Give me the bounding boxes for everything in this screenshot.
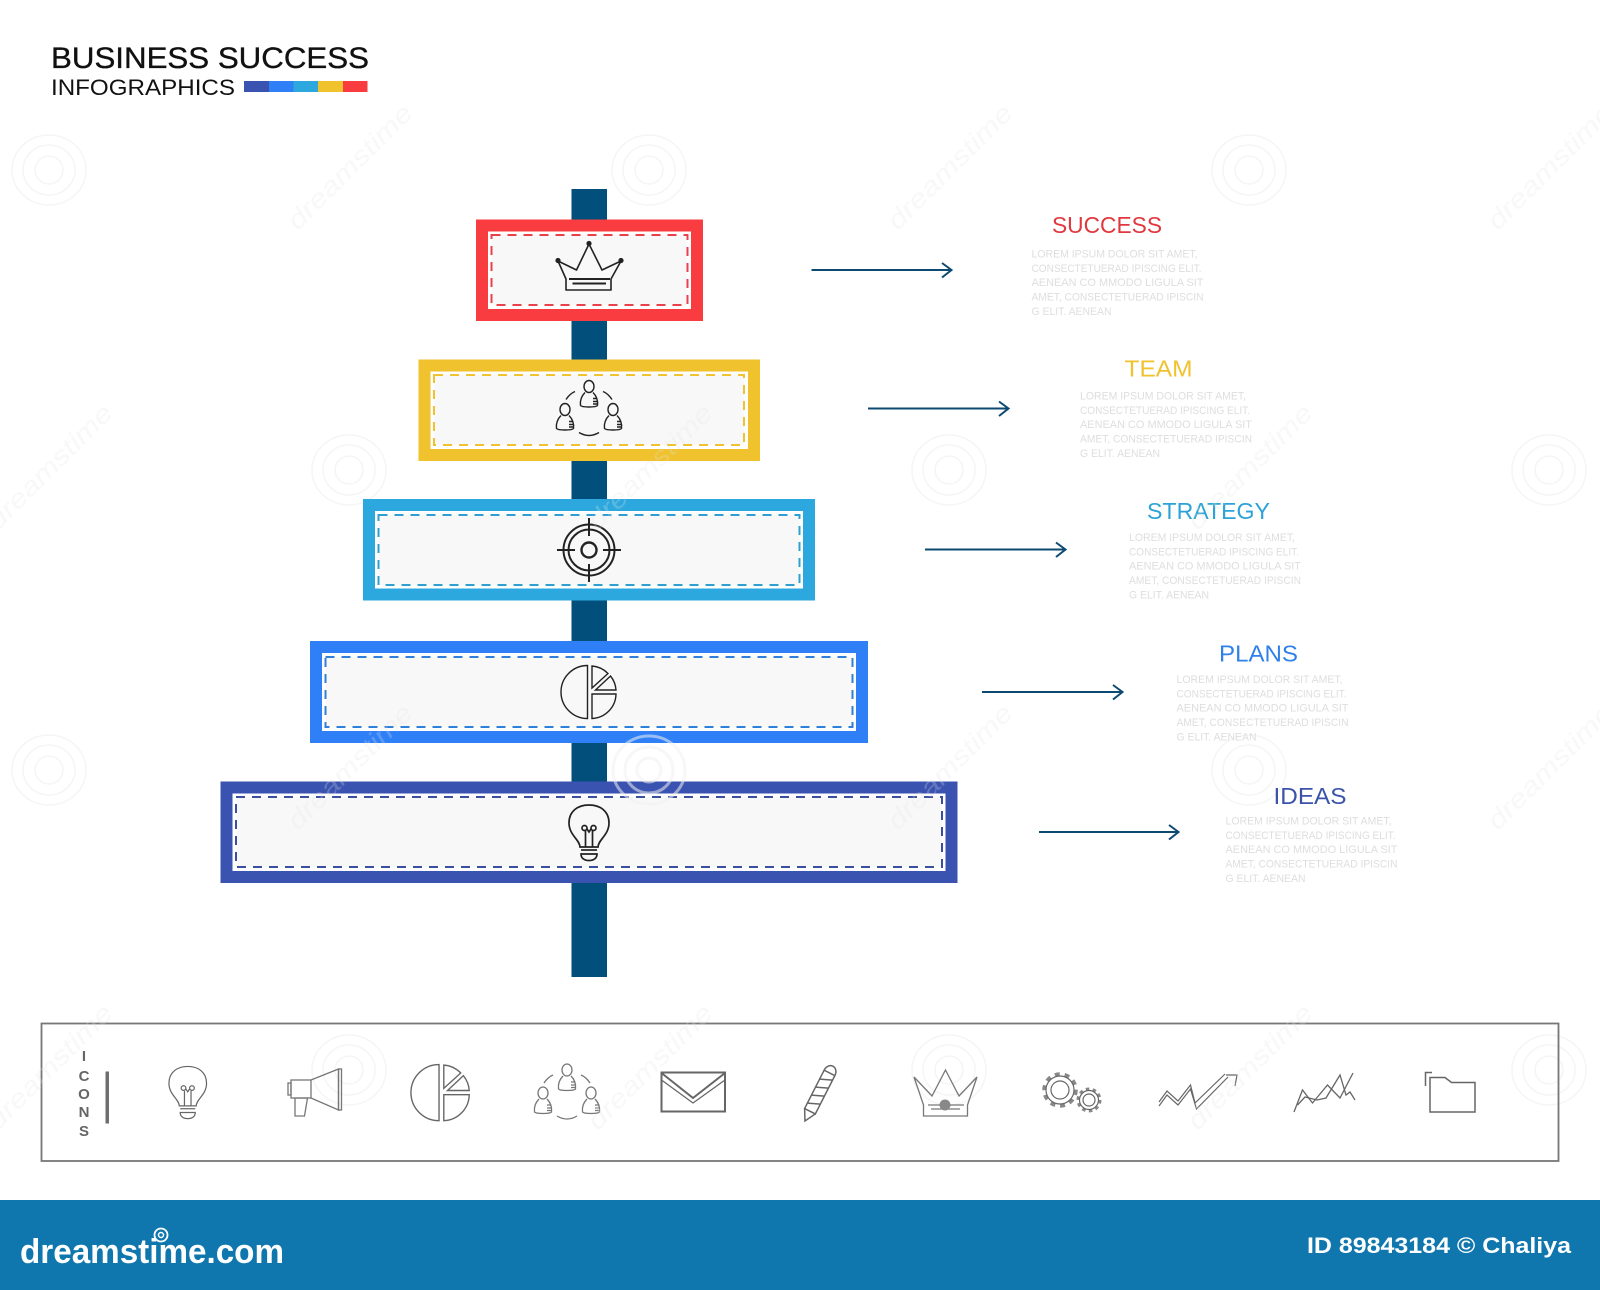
paragraph: team: AENEAN CO MMODO LIGULA SIT: [1080, 419, 1252, 431]
paragraph: success: [1032, 248, 1204, 318]
icon: light bulb: [169, 1066, 207, 1119]
icon: team: [556, 380, 622, 436]
text: dreamstime: [1181, 398, 1319, 536]
text block: team: [1080, 356, 1252, 460]
text: dreamstime: [581, 398, 719, 536]
label: icons: N: [79, 1104, 89, 1121]
heading: team: TEAM: [1124, 356, 1192, 382]
icon: zigzag chart: [1294, 1073, 1355, 1112]
arrow: ideas: [1039, 825, 1178, 840]
label: icons: S: [79, 1123, 89, 1140]
label: icons: [78, 1048, 90, 1140]
icon: pie chart: [411, 1065, 469, 1121]
text: dreamstime: [1481, 98, 1600, 236]
paragraph: success: LOREM IPSUM DOLOR SIT AMET,: [1032, 248, 1198, 260]
icon: envelope: [662, 1072, 725, 1112]
panel: ideas box: [220, 782, 958, 883]
icon: target: [557, 518, 621, 582]
paragraph: success: AENEAN CO MMODO LIGULA SIT: [1032, 277, 1204, 289]
paragraph: strategy: AMET, CONSECTETUERAD IPISCIN: [1129, 575, 1301, 587]
text: dreamstime: [581, 998, 719, 1136]
icon: pencil: [800, 1063, 838, 1124]
paragraph: plans: AMET, CONSECTETUERAD IPISCIN: [1176, 717, 1349, 729]
icon: gears: [1044, 1074, 1100, 1111]
icon: crown: [556, 242, 623, 290]
heading: ideas: IDEAS: [1274, 783, 1346, 809]
text: dreamstime: [881, 698, 1019, 836]
paragraph: plans: [1176, 674, 1349, 744]
paragraph: success: AMET, CONSECTETUERAD IPISCIN: [1032, 292, 1204, 304]
icon: team: [534, 1064, 600, 1119]
paragraph: plans: G ELIT. AENEAN: [1176, 732, 1257, 744]
text block: plans: [1176, 640, 1349, 744]
footer image id: ID 89843184 © Chaliya: [1307, 1233, 1572, 1258]
text: dreamstime: [281, 98, 419, 236]
title: business success: BUSINESS SUCCESS: [51, 42, 369, 75]
paragraph: success: CONSECTETUERAD IPISCING ELIT.: [1032, 263, 1202, 275]
text: dreamstime: [1181, 998, 1319, 1136]
footer banner: [0, 1200, 1600, 1290]
paragraph: team: AMET, CONSECTETUERAD IPISCIN: [1080, 434, 1252, 446]
icon: rising arrow: [1159, 1074, 1237, 1109]
text: dreamstime: [281, 698, 419, 836]
footer logo: dreamstime.com: [20, 1233, 284, 1271]
heading: success: SUCCESS: [1052, 212, 1162, 238]
colour bar: [244, 81, 368, 92]
panel: icon strip: [42, 1024, 1558, 1161]
panel: team box: [418, 360, 760, 461]
paragraph: ideas: [1226, 816, 1398, 885]
heading: strategy: STRATEGY: [1147, 498, 1270, 524]
arrow: team: [868, 402, 1008, 416]
paragraph: strategy: AENEAN CO MMODO LIGULA SIT: [1129, 560, 1301, 572]
text block: success: [1032, 212, 1204, 318]
paragraph: ideas: AENEAN CO MMODO LIGULA SIT: [1226, 844, 1398, 856]
arrow: plans: [982, 685, 1122, 700]
paragraph: strategy: [1129, 532, 1301, 602]
paragraph: plans: CONSECTETUERAD IPISCING ELIT.: [1176, 688, 1346, 700]
paragraph: strategy: CONSECTETUERAD IPISCING ELIT.: [1129, 546, 1299, 558]
paragraph: ideas: G ELIT. AENEAN: [1226, 873, 1306, 885]
paragraph: team: CONSECTETUERAD IPISCING ELIT.: [1080, 405, 1250, 417]
icon: light bulb: [569, 805, 609, 860]
label: icons: C: [79, 1068, 90, 1085]
icon: folder: [1426, 1072, 1475, 1112]
title block: [51, 42, 369, 100]
subtitle: infographics: INFOGRAPHICS: [51, 75, 235, 100]
arrow: strategy: [925, 542, 1066, 557]
icon: crown: [914, 1070, 977, 1116]
panel: success box: [476, 220, 703, 321]
paragraph: ideas: AMET, CONSECTETUERAD IPISCIN: [1226, 858, 1398, 870]
paragraph: strategy: LOREM IPSUM DOLOR SIT AMET,: [1129, 532, 1295, 544]
icon: megaphone: [288, 1069, 342, 1116]
paragraph: plans: AENEAN CO MMODO LIGULA SIT: [1176, 702, 1349, 714]
paragraph: success: G ELIT. AENEAN: [1032, 306, 1112, 318]
paragraph: team: LOREM IPSUM DOLOR SIT AMET,: [1080, 390, 1246, 402]
text: dreamstime: [1481, 698, 1600, 836]
text: dreamstime: [881, 98, 1019, 236]
central pole: [572, 189, 607, 977]
paragraph: strategy: G ELIT. AENEAN: [1129, 590, 1209, 602]
paragraph: ideas: LOREM IPSUM DOLOR SIT AMET,: [1226, 816, 1392, 828]
panel: plans box: [310, 641, 868, 743]
arrow: success: [812, 263, 952, 278]
heading: plans: PLANS: [1219, 640, 1298, 666]
text block: strategy: [1129, 498, 1301, 602]
label divider bar: [106, 1072, 109, 1124]
paragraph: team: [1080, 390, 1252, 460]
paragraph: team: G ELIT. AENEAN: [1080, 448, 1160, 460]
text block: ideas: [1226, 783, 1398, 885]
icon: pie chart: [561, 666, 616, 718]
paragraph: ideas: CONSECTETUERAD IPISCING ELIT.: [1226, 830, 1396, 842]
label: icons: I: [82, 1048, 86, 1065]
paragraph: plans: LOREM IPSUM DOLOR SIT AMET,: [1176, 674, 1342, 686]
panel: strategy box: [363, 499, 815, 600]
label: icons: O: [78, 1086, 90, 1103]
